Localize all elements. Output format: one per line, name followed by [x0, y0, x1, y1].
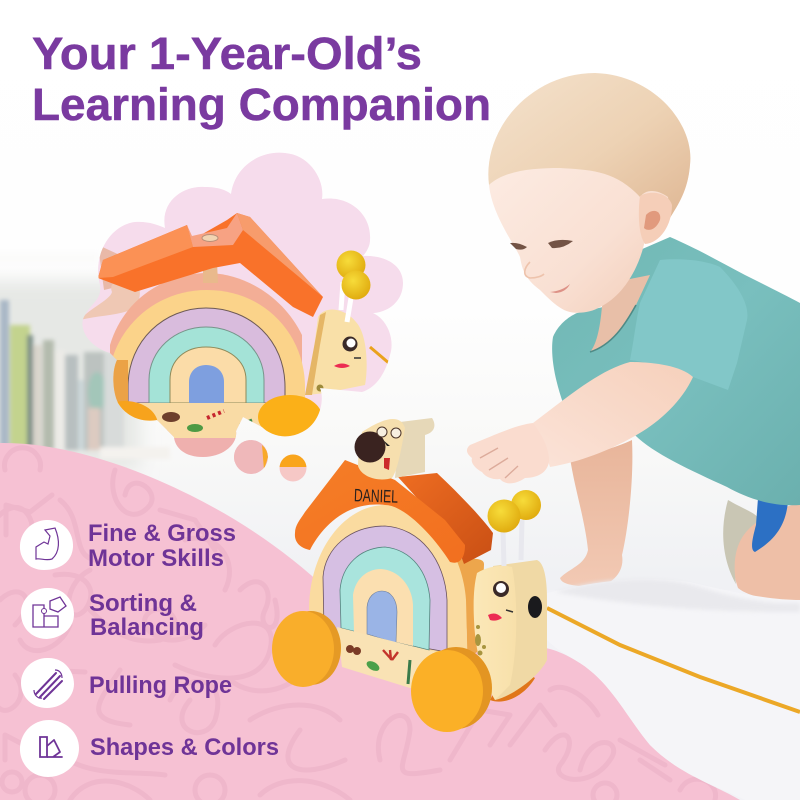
antennae — [488, 490, 541, 566]
icon: rope — [21, 658, 74, 708]
label — [89, 590, 204, 641]
baby head — [488, 73, 690, 313]
small toy: orange wheels — [113, 360, 320, 436]
label: Pulling Rope — [89, 672, 232, 699]
thought cloud with small toy — [82, 152, 403, 482]
top mini snail block — [354, 418, 434, 480]
title — [32, 28, 491, 130]
benefit: fine and gross motor skills — [20, 520, 236, 572]
snail head — [474, 560, 547, 700]
left wheel — [272, 611, 341, 687]
icon: flexed arm — [20, 520, 73, 570]
name on roof: DANIEL — [354, 485, 398, 507]
baby — [467, 73, 800, 603]
squiggle pattern on pink panel — [0, 448, 716, 800]
small toy: back shell — [110, 273, 302, 400]
roof side — [398, 473, 493, 564]
small toy: hand holding roof — [80, 245, 140, 320]
right wheel — [411, 647, 492, 732]
baby diaper — [723, 500, 760, 584]
baby shirt neckline — [590, 275, 650, 352]
rainbow arches — [309, 505, 468, 680]
baby hand — [467, 423, 549, 483]
baby arm — [533, 362, 693, 467]
baby blue strap — [752, 498, 788, 552]
baby shirt — [552, 237, 800, 505]
baby sleeve — [630, 259, 747, 390]
label: Motor Skills — [88, 545, 224, 572]
benefit: pulling rope — [21, 658, 232, 708]
small toy: pink lobe under base — [160, 430, 250, 462]
icon: colour swatch — [20, 720, 79, 777]
label: Fine & Gross — [88, 520, 236, 547]
small toy: peg — [203, 267, 218, 283]
small toy: antennae — [336, 250, 370, 322]
small toy: rainbow arches — [108, 290, 305, 405]
title: Learning Companion — [32, 79, 491, 130]
thought bubble dots — [234, 440, 306, 482]
small toy: base with decorations — [110, 403, 285, 438]
small toy: cream head — [305, 310, 367, 395]
icon: puzzle — [21, 588, 74, 639]
pink curved panel — [0, 443, 740, 800]
small toy: rope — [370, 347, 390, 364]
pull rope — [547, 608, 800, 712]
wood base with decorations — [337, 627, 475, 690]
baby eyes — [548, 240, 573, 248]
baby nose and mouth — [525, 262, 544, 278]
label: Sorting & — [89, 590, 197, 617]
white fluffy carpet — [520, 579, 800, 800]
benefit: sorting and balancing — [21, 588, 204, 641]
label: Shapes & Colors — [90, 734, 279, 761]
small toy: orange roof — [98, 213, 323, 317]
label: Balancing — [90, 614, 204, 641]
baby hair — [488, 73, 690, 218]
baby ear — [639, 193, 672, 244]
body underside — [490, 672, 535, 702]
main snail toy — [272, 418, 547, 732]
label — [88, 520, 236, 572]
baby supporting arm — [560, 440, 632, 587]
shell side — [440, 559, 484, 660]
orange roof — [295, 460, 465, 563]
title: Your 1-Year-Old’s — [32, 28, 422, 79]
baby knee and thigh — [733, 503, 800, 603]
benefit: shapes and colors — [20, 720, 279, 777]
blurred bookshelf — [0, 300, 170, 459]
